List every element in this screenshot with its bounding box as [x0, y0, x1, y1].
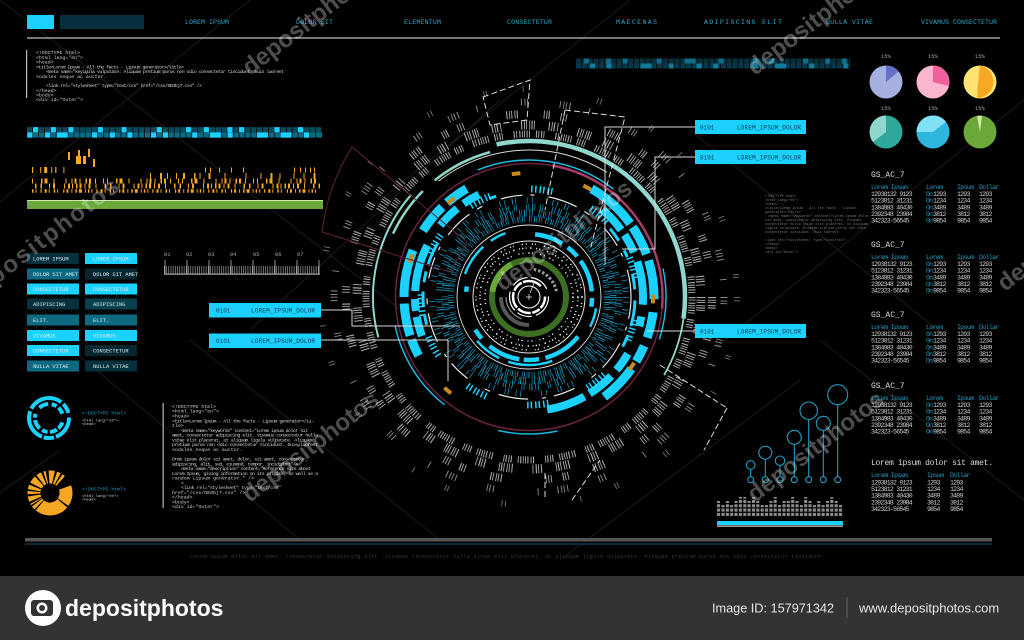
- gauge caption: orange: <html lang="en">: [82, 494, 119, 499]
- data table 4: 3812: [957, 422, 970, 429]
- data table 3: 12938132 9123: [871, 331, 913, 338]
- button grid: CONSECTETUR: [33, 348, 69, 354]
- data table 3: 1234: [979, 338, 992, 345]
- data table 4: 1234: [957, 409, 970, 416]
- data table 4: 1293: [933, 402, 946, 409]
- data table 1: 9854: [979, 218, 992, 225]
- small code block: center right: sit amet, consectetur adipiscing elit. Vivamus: [765, 218, 862, 223]
- data table 3: 2392348 23984: [871, 351, 913, 358]
- data table 4: GS_AC_7: [871, 382, 905, 391]
- code block: bottom left: random Lipsum generator." />: [172, 476, 254, 482]
- data table 4: 3489: [933, 415, 946, 422]
- data table 4: 3489: [957, 415, 970, 422]
- logo icon: [25, 590, 61, 626]
- data table 4: 1293: [979, 402, 992, 409]
- label: right 3: [695, 324, 806, 338]
- data table 3: 3489: [933, 344, 946, 351]
- icon: orange radial gauge: [29, 472, 71, 514]
- data table 3: 1234: [957, 338, 970, 345]
- data table 3: 9854: [957, 358, 970, 365]
- small code block: center right: consectetur nulla vitae elit placerat, ut aliquam: [765, 222, 868, 227]
- data table 3: On: [926, 338, 933, 345]
- data table 2: 1234: [957, 268, 970, 275]
- watermark: [0, 0, 1024, 508]
- button grid: CONSECTETUR: [93, 348, 129, 354]
- button grid: VIVAMUS: [33, 334, 56, 340]
- outer teal ring: [323, 91, 735, 503]
- small code block: center right: </head>: [765, 242, 780, 247]
- data table 4: On: [926, 402, 933, 409]
- gauge caption: cyan: <html lang="en">: [82, 418, 119, 424]
- data table 1: 1234: [979, 198, 992, 205]
- data table 3: [871, 311, 1000, 365]
- green ring: [487, 255, 571, 339]
- button grid: [27, 253, 139, 372]
- data table 1: 1293: [933, 191, 946, 198]
- code block: bottom left: Lorem Ipsum, giving information on its origins, as well as a: [172, 471, 318, 477]
- data table 1: 3812: [933, 211, 946, 218]
- footer band: depositphotos: [65, 595, 223, 621]
- data table 1: 1234: [957, 198, 970, 205]
- footer band: [0, 576, 1024, 640]
- inner gray arcs: [497, 265, 561, 329]
- top navigation bar: VIVAMUS CONSECTETUR: [921, 19, 997, 26]
- data table 2: 342323-56545: [871, 288, 910, 295]
- data table 4: On: [926, 429, 933, 436]
- data table 1: 1293: [957, 191, 970, 198]
- data table 5: 3489: [927, 493, 940, 500]
- data table 4: 1293: [957, 402, 970, 409]
- code block: bottom left: <html lang="en">: [172, 409, 219, 415]
- data table 1: On: [926, 198, 933, 205]
- data table 3: 3812: [957, 351, 970, 358]
- data table 4: Lorem: [926, 395, 943, 402]
- watermark: depositphotos: [490, 175, 638, 297]
- button grid: ADIPISCING: [33, 302, 65, 308]
- top navigation bar: ADIPISCING ELIT: [704, 19, 782, 26]
- top navigation bar: DOLOR SIT: [296, 19, 333, 26]
- data table 3: Lorem Ipsum: [871, 324, 908, 331]
- label: left 1: [209, 303, 321, 318]
- data table 2: 9854: [979, 288, 992, 295]
- data table 4: 12938132 9123: [871, 402, 913, 409]
- gauge caption: orange: <!DOCTYPE html>: [82, 486, 126, 492]
- code block: bottom left: Drem ipsum dolor sit amet, dolor, sit amet, consectetur,: [172, 456, 308, 462]
- data table 3: 3489: [957, 344, 970, 351]
- data table 1: 3489: [957, 204, 970, 211]
- data table 1: Ipsum: [957, 184, 974, 191]
- code block: bottom left: <meta name="description" content="Reference site about: [181, 466, 311, 472]
- data table 3: 1234: [933, 338, 946, 345]
- data table 3: 9854: [933, 358, 946, 365]
- label: right 2: [695, 150, 806, 164]
- small code block: center right: consectetur tincidunt. Duis laoreet: [765, 230, 839, 235]
- data table 5: 1293: [927, 480, 940, 486]
- footer band: Image ID: 157971342: [712, 602, 834, 616]
- button grid: CONSECTETUR: [33, 287, 69, 293]
- data table 3: Ipsum: [957, 324, 974, 331]
- gauge caption: cyan: <head>: [82, 422, 96, 427]
- data table 5: 1293: [950, 480, 963, 486]
- small code block: center right: [765, 194, 869, 255]
- code block: bottom left: <title>Lorem Ipsum - All the facts - Lipsum generator</ti-: [172, 418, 314, 424]
- ruler scale: 06: [275, 252, 281, 258]
- data table 3: On: [926, 344, 933, 351]
- small code block: center right: <title>Lorem Ipsum - All the facts - Lipsum: [765, 206, 855, 211]
- data table 2: 3812: [957, 281, 970, 288]
- button grid: ADIPISCING: [93, 302, 125, 308]
- white dashed rings: [427, 195, 631, 399]
- data table 4: 2392348 23984: [871, 422, 913, 429]
- pixel mosaic strip: top right: [576, 61, 850, 66]
- label: right 3: LOREM_IPSUM_DOLOR: [737, 328, 801, 336]
- code block: bottom left: <head>: [172, 414, 190, 420]
- data table 5: Dollar: [950, 472, 971, 479]
- top navigation bar: NULLA VITAE: [826, 19, 873, 26]
- code block: bottom left: amet, consectetur adipiscing elit. Vivamus consectetur nulla: [172, 433, 318, 439]
- code block: bottom left: <link rel="stylesheet" type="text/css": [181, 485, 281, 491]
- code block: bottom left: tle>: [172, 423, 184, 429]
- data table 2: 1234: [979, 268, 992, 275]
- data table 1: 342323-56545: [871, 218, 910, 225]
- label: right 2: 0101: [700, 154, 715, 162]
- data table 1: 12938132 9123: [871, 191, 913, 198]
- data table 5: 3489: [950, 493, 963, 500]
- code block: top left: <div id="Outer">: [36, 97, 83, 103]
- cyan blocks: [360, 128, 698, 466]
- code block: bottom left: href="/css/DEObj7.css" />: [172, 490, 245, 496]
- data table 3: 3812: [979, 351, 992, 358]
- code block: bottom left: </head>: [172, 495, 193, 501]
- small code block: center right: ligula vulputate. Aliquam pretium purus non odio: [765, 226, 866, 231]
- data table 2: Ipsum: [957, 254, 974, 261]
- data table 2: 1293: [979, 261, 992, 268]
- data table 4: 1234: [933, 409, 946, 416]
- data table 3: 1293: [957, 331, 970, 338]
- data table 1: On: [926, 204, 933, 211]
- bottom caption: Lorem ipsum dolor sit amet, consectetur adipiscing elit. Vivamus consectetur nulla vitae elit placerat, ut aliquam ligula vulputate. Aliquam pretium purus non odio consectetur tincidunt.: [190, 554, 825, 560]
- code block: top left: </head>: [36, 88, 57, 94]
- code block: bottom left: <meta name="keywords" content="Lorem ipsum dolor sit: [181, 428, 308, 434]
- data table 2: 3812: [933, 281, 946, 288]
- button grid: ELIT.: [93, 318, 109, 324]
- data table 3: 5123812 31231: [871, 338, 913, 345]
- pie charts: 15%: [928, 106, 938, 112]
- data table 2: On: [926, 274, 933, 281]
- code block: bottom left: [162, 403, 318, 510]
- data table 3: On: [926, 358, 933, 365]
- data table 2: 9854: [933, 288, 946, 295]
- code block: top left: <!DOCTYPE html>: [36, 50, 80, 56]
- data table 2: 5123812 31231: [871, 268, 913, 275]
- data table 1: 1234: [933, 198, 946, 205]
- data table 5: Lorem ipsum dolor sit amet.: [871, 459, 993, 468]
- data table 5: 12938132 9123: [871, 480, 913, 486]
- data table 4: 3489: [979, 415, 992, 422]
- bar under equalizer: [717, 521, 843, 527]
- data table 2: 2392348 23984: [871, 281, 913, 288]
- label: left 2: [209, 334, 321, 348]
- pink wedge outline: [322, 147, 467, 272]
- data table 4: 3812: [979, 422, 992, 429]
- inner cyan segments: [450, 218, 608, 376]
- data table 2: 12938132 9123: [871, 261, 913, 268]
- code block: bottom left: <div id="Outer">: [172, 504, 219, 510]
- pink and blue rings: [351, 119, 707, 475]
- watermark: depositphotos: [237, 386, 385, 508]
- ruler scale: 07: [297, 252, 303, 258]
- data table 1: 2392348 23984: [871, 211, 913, 218]
- label: right 1: [695, 120, 806, 134]
- data table 3: GS_AC_7: [871, 311, 905, 320]
- data table 2: [871, 241, 1000, 295]
- data table 2: On: [926, 288, 933, 295]
- pie charts: 15%: [975, 106, 985, 112]
- white core: [510, 278, 548, 316]
- blue noise ring: [432, 200, 626, 394]
- data table 5: [871, 459, 993, 513]
- data table 3: 1293: [933, 331, 946, 338]
- ruler scale: 01: [164, 252, 170, 258]
- data table 4: Ipsum: [957, 395, 974, 402]
- pie charts: 15%: [975, 54, 985, 60]
- data table 5: 1384983 40430: [871, 493, 913, 500]
- code block: bottom left: <body>: [172, 500, 190, 506]
- data table 2: 1234: [933, 268, 946, 275]
- data table 2: 1293: [933, 261, 946, 268]
- data table 2: Lorem Ipsum: [871, 254, 908, 261]
- data table 4: [871, 382, 1000, 436]
- pie charts: 15%: [881, 54, 891, 60]
- data table 5: 5123812 31231: [871, 486, 913, 493]
- gauge caption: orange: <head>: [82, 498, 96, 502]
- data table 1: 3812: [957, 211, 970, 218]
- data table 1: 9854: [957, 218, 970, 225]
- dotted rings: [476, 244, 582, 350]
- button grid: CONSECTETUR: [93, 287, 129, 293]
- data table 4: On: [926, 422, 933, 429]
- bottom divider bars: [25, 538, 992, 545]
- data table 3: 1384983 40430: [871, 344, 913, 351]
- data table 3: Dollar: [979, 324, 1000, 331]
- data table 4: 3812: [933, 422, 946, 429]
- data table 2: 3489: [979, 274, 992, 281]
- data table 3: 3812: [933, 351, 946, 358]
- equalizer blocks: [718, 497, 840, 516]
- data table 1: 3489: [979, 204, 992, 211]
- data table 5: 3812: [927, 499, 940, 506]
- data table 2: GS_AC_7: [871, 241, 905, 250]
- data table 1: 3489: [933, 204, 946, 211]
- data table 5: 2392348 23984: [871, 499, 913, 506]
- data table 1: On: [926, 218, 933, 225]
- code block: bottom left: <: [181, 480, 184, 486]
- data table 4: 1234: [979, 409, 992, 416]
- small code block: center right: <!DOCTYPE html>: [765, 194, 797, 199]
- data table 3: 3489: [979, 344, 992, 351]
- data table 4: 1384983 40430: [871, 415, 913, 422]
- button grid: NULLA VITAE: [33, 364, 69, 370]
- data table 4: 9854: [957, 429, 970, 436]
- button grid: VIVAMUS: [93, 334, 116, 340]
- data table 3: Lorem: [926, 324, 943, 331]
- code block: top left: <link rel="stylesheet" type="text/css" href="/css/DEObj7.css" />: [46, 83, 202, 89]
- green progress bar: [27, 200, 323, 209]
- data table 3: 1293: [979, 331, 992, 338]
- data table 2: On: [926, 281, 933, 288]
- data table 1: 1293: [979, 191, 992, 198]
- data table 3: 342323-56545: [871, 358, 910, 365]
- data table 4: Dollar: [979, 395, 1000, 402]
- orange histogram: [32, 153, 320, 191]
- button grid: LOREM IPSUM: [33, 256, 69, 262]
- data table 4: On: [926, 415, 933, 422]
- data table 2: Lorem: [926, 254, 943, 261]
- data table 5: 1234: [950, 486, 963, 493]
- top navigation bar: ELEMENTUM: [404, 19, 441, 26]
- data table 1: GS_AC_7: [871, 171, 905, 180]
- data table 5: 9854: [927, 506, 940, 513]
- connector lines: [321, 127, 695, 381]
- data table 1: On: [926, 191, 933, 198]
- data table 1: [871, 171, 1000, 225]
- data table 2: 9854: [957, 288, 970, 295]
- label: left 2: LOREM_IPSUM_DOLOR: [251, 338, 315, 345]
- code block: top left: <meta name="keyigula vulputate: Aliquam pretium purus non odio consectetur tincidunt. Duis laoreet: [46, 69, 284, 75]
- small code block: center right: <meta name="keywords" content="Lorem ipsum dolor: [768, 214, 869, 219]
- data table 2: 1293: [957, 261, 970, 268]
- code block: top left: <html lang="en">: [36, 55, 83, 61]
- dashed white polygons: [483, 80, 727, 500]
- icon: cyan radial gauge: [29, 398, 69, 438]
- label: right 1: LOREM_IPSUM_DOLOR: [737, 124, 801, 132]
- small code block: center right: <html lang="en">: [765, 198, 799, 203]
- footer band: www.depositphotos.com: [858, 600, 999, 616]
- data table 3: On: [926, 351, 933, 358]
- code block: bottom left: sodales neque ac auctor.: [172, 447, 242, 453]
- gauge caption: orange: [82, 486, 126, 502]
- label: right 3: 0101: [700, 328, 715, 336]
- label: right 1: 0101: [700, 124, 715, 132]
- code block: bottom left: <!DOCTYPE html>: [172, 404, 216, 410]
- label: left 1: 0101: [216, 308, 231, 314]
- small code block: center right: <body>: [765, 246, 778, 251]
- gauge caption: cyan: <!DOCTYPE html>: [82, 410, 126, 416]
- data table 3: On: [926, 331, 933, 338]
- data table 4: 5123812 31231: [871, 409, 913, 416]
- top navigation bar: MAECENAS: [616, 19, 657, 26]
- data table 1: Lorem Ipsum: [871, 184, 908, 191]
- data table 5: 1234: [927, 486, 940, 493]
- data table 2: 3812: [979, 281, 992, 288]
- code block: top left: <title>Lorem Ipsum - All the facts - Lipsum generator</title>: [36, 64, 184, 70]
- central radial HUD: [321, 89, 737, 505]
- data table 5: Ipsum: [927, 472, 944, 479]
- ruler scale: 05: [253, 252, 259, 258]
- data table 5: 342323-56545: [871, 506, 910, 513]
- data table 5: 9854: [950, 506, 963, 513]
- ruler scale: [164, 252, 320, 275]
- data table 1: 9854: [933, 218, 946, 225]
- data table 1: 3812: [979, 211, 992, 218]
- button grid: ELIT.: [33, 318, 49, 324]
- pie charts: 15%: [881, 106, 891, 112]
- data table 4: On: [926, 409, 933, 416]
- data table 2: Dollar: [979, 254, 1000, 261]
- gauge caption: cyan: [82, 410, 126, 427]
- data table 4: 9854: [979, 429, 992, 436]
- code block: top left: [26, 50, 284, 103]
- button grid: DOLOR SIT AMET: [33, 272, 79, 278]
- code block: bottom left: vitae elit placerat, ut aliquam ligula vulputate. Aliquam: [172, 437, 312, 443]
- data table 5: 3812: [950, 499, 963, 506]
- data table 1: 5123812 31231: [871, 198, 913, 205]
- button grid: NULLA VITAE: [93, 364, 129, 370]
- data table 1: Dollar: [979, 184, 1000, 191]
- code block: top left: <head>: [36, 60, 54, 66]
- ruler scale: 03: [208, 252, 214, 258]
- pie charts: 15%: [928, 54, 938, 60]
- small code block: center right: <head>: [765, 202, 778, 207]
- label: right 2: LOREM_IPSUM_DOLOR: [737, 154, 801, 162]
- label: left 1: LOREM_IPSUM_DOLOR: [251, 308, 315, 314]
- button grid: DOLOR SIT AMET: [93, 272, 139, 278]
- data table 2: 1384983 40430: [871, 274, 913, 281]
- data table 5: Lorem Ipsum: [871, 472, 908, 479]
- code block: bottom left: adipiscing, alit, sed, eiusmod, tempor, incididunt"/>: [172, 461, 298, 467]
- data table 2: 3489: [933, 274, 946, 281]
- code block: top left: <body>: [36, 92, 54, 98]
- top navigation bar: [27, 15, 1000, 39]
- small code block: center right: <div id="Outer">: [765, 250, 799, 255]
- data table 2: On: [926, 268, 933, 275]
- lollipop chart: [746, 385, 848, 483]
- orange markers: [403, 171, 655, 423]
- pie charts: [870, 54, 996, 148]
- small code block: center right: <link rel="stylesheet" type="text/css": [765, 238, 845, 243]
- ruler scale: 04: [230, 252, 236, 258]
- data table 3: 9854: [979, 358, 992, 365]
- code block: top left: sodales neque ac auctor.: [36, 74, 106, 80]
- data table 2: On: [926, 261, 933, 268]
- data table 1: On: [926, 211, 933, 218]
- small code block: center right: generator</title>: [765, 210, 801, 215]
- data table 4: Lorem Ipsum: [871, 395, 908, 402]
- top navigation bar: LOREM IPSUM: [185, 19, 229, 26]
- button grid: LOREM IPSUM: [93, 256, 129, 262]
- pixel mosaic strip: left: [27, 130, 322, 135]
- data table 1: 1384983 40430: [871, 204, 913, 211]
- top navigation bar: CONSECTETUR: [507, 19, 552, 26]
- data table 2: 3489: [957, 274, 970, 281]
- code block: bottom left: pretium purus non odio consectetur tincidunt. Duis laoreet: [172, 442, 318, 448]
- data table 4: 342323-56545: [871, 429, 910, 436]
- radial ticks: [321, 89, 737, 505]
- data table 4: 9854: [933, 429, 946, 436]
- watermark: depositphotos: [742, 386, 890, 508]
- data table 1: Lorem: [926, 184, 943, 191]
- label: left 2: 0101: [216, 338, 231, 345]
- ruler scale: 02: [186, 252, 192, 258]
